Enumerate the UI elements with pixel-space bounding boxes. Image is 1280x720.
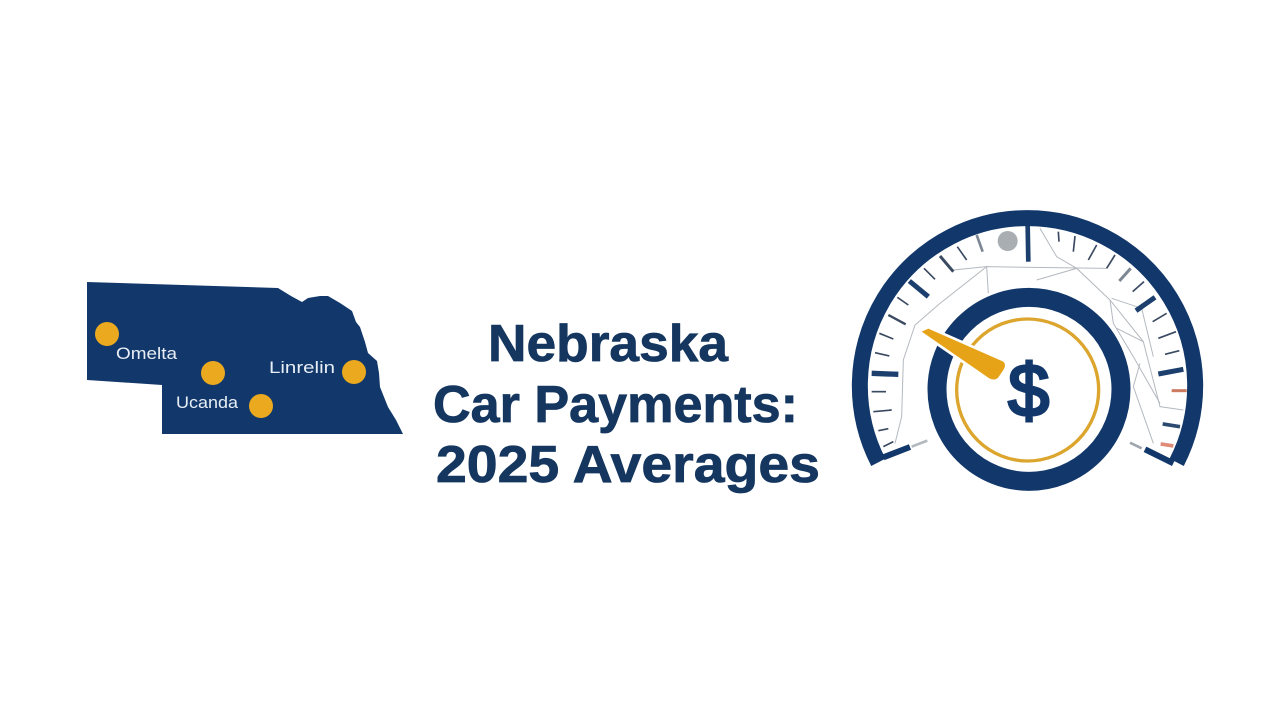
grey dial knob <box>998 231 1018 251</box>
title line 2: Car Payments: <box>433 376 798 434</box>
gauge network lines <box>895 228 1183 443</box>
city marker: east <box>342 360 366 384</box>
gold ring <box>957 319 1099 461</box>
gauge needle <box>922 329 1005 379</box>
title line 1: Nebraska <box>488 315 729 373</box>
city marker: centre <box>201 361 225 385</box>
city label: Omelta: Omelta <box>116 344 178 363</box>
panel: Nebraska map <box>87 282 403 434</box>
gauge tick marks <box>872 226 1187 463</box>
title line 3: 2025 Averages <box>436 436 820 494</box>
dollar sign: $ <box>1008 349 1049 432</box>
gauge outer arc <box>860 218 1195 462</box>
inner navy ring <box>937 297 1121 481</box>
title <box>433 315 820 494</box>
city marker: west <box>95 322 119 346</box>
icon: speedometer gauge with dollar sign <box>860 218 1195 481</box>
city label: Linrelin: Linrelin <box>269 358 335 377</box>
city label: Ucanda: Ucanda <box>176 393 239 412</box>
city marker: south <box>249 394 273 418</box>
state shape <box>87 282 403 434</box>
